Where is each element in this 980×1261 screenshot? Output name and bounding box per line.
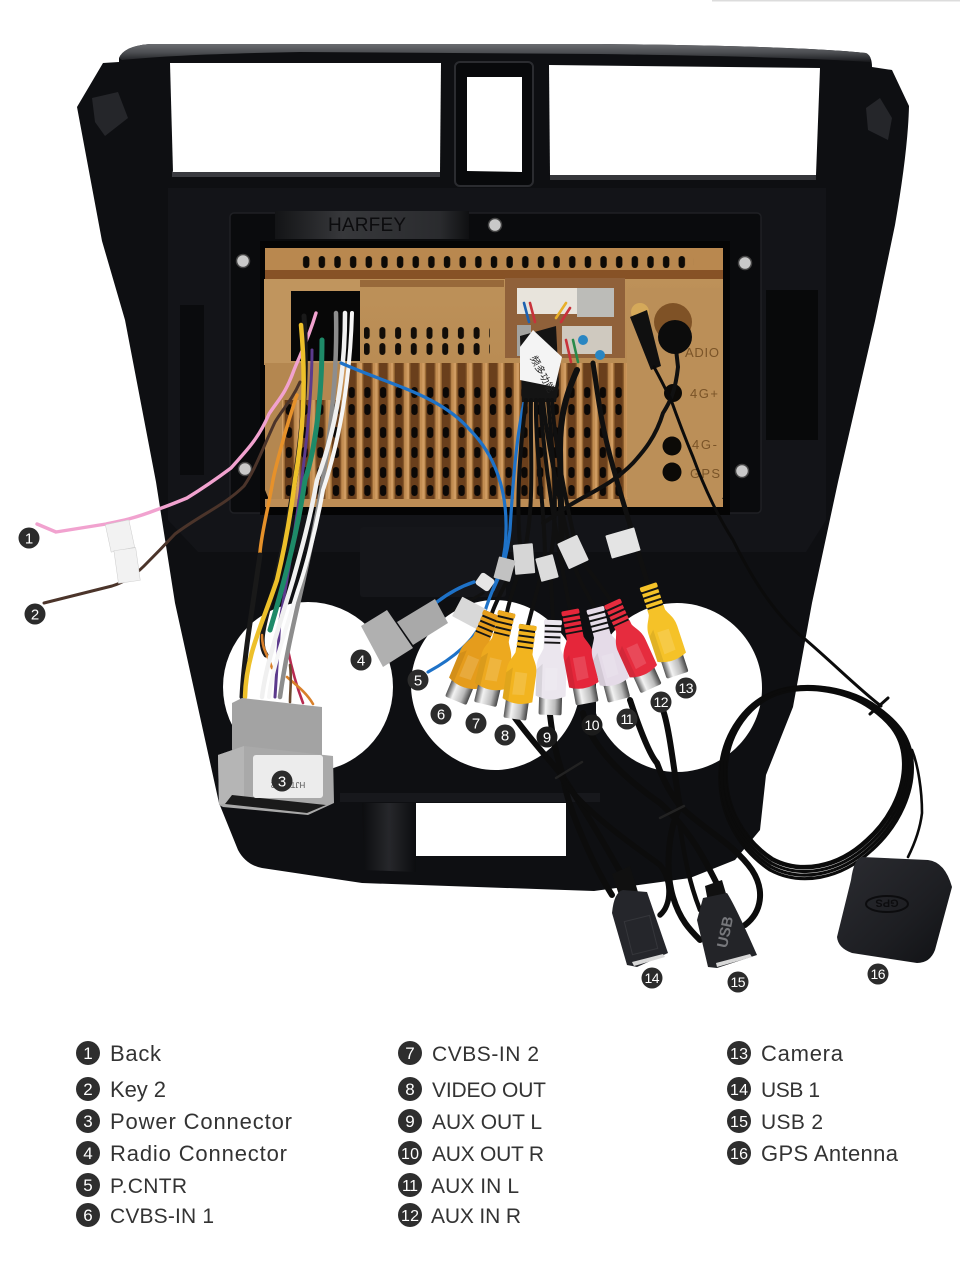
antenna hole lower [662, 462, 682, 482]
legend item 13: 13 [730, 1046, 748, 1063]
connector front [218, 746, 334, 815]
harness recess [505, 278, 625, 358]
camera cable [593, 363, 648, 585]
loose wires: back and key [37, 313, 316, 603]
callout 12 [650, 692, 672, 712]
port labels: GPS [690, 466, 720, 481]
port labels: ADIO [685, 345, 719, 360]
connector leads [524, 303, 578, 362]
legend item 6 [76, 1203, 214, 1228]
callout 7 [466, 712, 486, 734]
centre cable [560, 370, 577, 560]
HARFEY label strip [275, 211, 469, 239]
panel: gold radio back housing [260, 241, 730, 515]
legend item 14: USB 1 [761, 1079, 820, 1102]
legend item 2 [76, 1077, 166, 1102]
callout 8: 8 [501, 728, 509, 744]
GPS coil fourth [726, 690, 903, 866]
inner recess [168, 188, 826, 552]
tag group left [513, 543, 535, 575]
callout 3 [272, 770, 292, 792]
top edge line [712, 0, 960, 2]
callout 11 [616, 708, 638, 730]
right window [549, 65, 820, 175]
radio connector [361, 599, 448, 667]
camera cable loop [663, 710, 700, 940]
callout 9 [536, 726, 558, 748]
cable to USB 2 b [630, 700, 760, 925]
brown key wire [44, 382, 300, 603]
right side pocket [766, 290, 818, 440]
legend item 2: 2 [83, 1080, 93, 1099]
window bottom lip left [172, 171, 440, 177]
plug: camera yellow [634, 580, 692, 680]
legend item 7: 7 [405, 1044, 415, 1063]
callout 13: 13 [678, 680, 694, 696]
wire tag lower [114, 548, 140, 583]
yellow wire [245, 325, 304, 697]
left ear clip [92, 92, 128, 136]
legend item 1 [76, 1041, 162, 1066]
white wire [262, 313, 345, 697]
callout 14 [642, 968, 662, 988]
legend item 15: 15 [730, 1114, 748, 1131]
fin bank [282, 363, 628, 507]
legend item 14 [727, 1077, 820, 1102]
callout 5: 5 [414, 672, 422, 690]
callout 6 [430, 704, 452, 724]
camera tag [605, 527, 641, 559]
connector side shade [218, 746, 244, 805]
legend item 13: Camera [761, 1041, 844, 1066]
callout 1: 1 [25, 530, 33, 548]
antenna return cable [543, 340, 678, 523]
GPS embossed text: GPS [875, 896, 899, 908]
USB 1 body [612, 890, 668, 967]
legend item 12: AUX IN R [431, 1205, 521, 1228]
white outer wire [269, 313, 352, 697]
harness tape and label [520, 326, 562, 402]
blue capacitor caps [578, 335, 605, 360]
GPS coil third [721, 687, 910, 875]
USB 2 plug [697, 880, 757, 968]
cable to USB 1 a [515, 718, 622, 875]
legend item 10: AUX OUT R [432, 1143, 544, 1166]
cable tie right [660, 806, 684, 818]
USB 1 symbol panel [624, 915, 658, 955]
main body [264, 279, 723, 365]
orange wire [260, 395, 297, 552]
legend item 5 [76, 1173, 187, 1198]
large socket [654, 303, 692, 341]
connector socket [291, 291, 360, 361]
black wire [262, 316, 305, 655]
cable loop left [560, 775, 669, 915]
lower left fin bank [282, 400, 342, 507]
RCA plug row [442, 580, 692, 721]
lower vent block [340, 793, 600, 802]
grey connector [577, 288, 614, 317]
harness wires [492, 340, 678, 625]
left side pocket [180, 305, 204, 475]
legend item 9: AUX OUT L [432, 1111, 542, 1134]
shadow band [265, 270, 723, 280]
legend item 10: 10 [401, 1146, 419, 1163]
blue radio wire [437, 582, 474, 602]
vent hole divider [578, 600, 596, 780]
fan wire 6 [552, 400, 612, 602]
fan wire 5 [548, 400, 555, 620]
cable to USB 1 b [550, 715, 612, 895]
port labels [685, 345, 720, 481]
legend item 6: CVBS-IN 1 [110, 1205, 214, 1228]
plug: AUX OUT L white [535, 620, 568, 715]
left vent hole [223, 602, 393, 772]
callout 10 [582, 714, 602, 736]
plug: AUX OUT R red [555, 607, 602, 706]
legend item 5: 5 [83, 1176, 93, 1195]
lower centre window [416, 803, 566, 856]
legend item 4: Radio Connector [110, 1141, 287, 1166]
radio antenna socket and cables [630, 303, 692, 370]
radio connector second piece [397, 599, 448, 645]
paper label [520, 330, 562, 387]
plug: AUX IN L white [580, 604, 634, 704]
fan wire 4 [543, 400, 595, 608]
label print: HJT #202 [270, 780, 305, 789]
callout 6: 6 [437, 706, 445, 724]
USB 2 body [697, 893, 757, 968]
radio tag [452, 597, 487, 629]
callout 13 [676, 678, 696, 698]
black heat shrink [242, 555, 260, 697]
callout 16 [868, 964, 888, 984]
plug: AUX IN R red [598, 596, 665, 695]
GPS stem [908, 750, 922, 857]
blue wire bundle [493, 398, 525, 590]
callout 11: 11 [620, 711, 634, 727]
legend item 2: Key 2 [110, 1077, 166, 1102]
right ear clip [866, 98, 892, 140]
centre window surround [455, 62, 533, 186]
orange short wire [287, 677, 313, 704]
HARFEY text: HARFEY [328, 215, 406, 236]
fan wire 3 [528, 400, 545, 625]
legend item 12 [398, 1203, 521, 1228]
port labels: 4G- [692, 437, 717, 452]
blue wire long [341, 363, 506, 672]
legend item 3: Power Connector [110, 1109, 292, 1134]
lower left gold block [265, 363, 342, 507]
mounting bracket [230, 213, 761, 513]
callout 14: 14 [644, 970, 660, 986]
USB 2 port [716, 954, 752, 967]
lower left connector [517, 325, 531, 356]
fan wire 2 [507, 400, 531, 612]
white connector [517, 288, 577, 314]
legend item 16: 16 [730, 1146, 748, 1163]
left window [170, 63, 441, 172]
plug: CVBS-IN 2 orange [471, 609, 522, 708]
legend item 5: P.CNTR [110, 1175, 187, 1198]
USB 1 plug [612, 866, 668, 967]
USB and AUX black cables [515, 700, 760, 940]
legend item 1: 1 [83, 1044, 93, 1063]
legend item 15 [727, 1109, 823, 1134]
callout 1 [18, 528, 40, 548]
middle vent slots [364, 326, 490, 358]
legend item 7 [398, 1041, 539, 1066]
callout 10: 10 [584, 717, 600, 733]
callout 5 [408, 670, 428, 690]
pink back wire [37, 313, 316, 532]
window bottom lip right [550, 174, 816, 180]
connector opening [225, 795, 326, 813]
callout 2 [24, 604, 46, 624]
GPS embossed logo [866, 896, 908, 912]
fan wire 7 [540, 400, 570, 610]
GPS antenna cable [654, 367, 922, 879]
callout 4 [350, 650, 372, 670]
cable to USB 2 a [583, 713, 717, 884]
GPS coil fifth [725, 687, 906, 868]
legend item 6: 6 [83, 1206, 93, 1225]
wire tag upper [105, 520, 135, 552]
power wire bundle [242, 313, 352, 704]
legend item 11: 11 [402, 1178, 418, 1195]
left raised plate [264, 279, 360, 363]
legend item 16: GPS Antenna [761, 1141, 899, 1166]
legend item 7: CVBS-IN 2 [432, 1043, 539, 1066]
cable tags [452, 527, 641, 629]
GPS cable tie [870, 698, 888, 714]
centre window [467, 77, 522, 172]
top strip [265, 248, 723, 272]
callout 7: 7 [472, 716, 480, 732]
grey wire [280, 313, 336, 697]
antenna hole middle [662, 436, 682, 456]
port labels: 4G+ [690, 386, 718, 401]
legend item 14: 14 [730, 1082, 748, 1099]
panel: black dash fascia frame [77, 44, 909, 891]
GPS cable from head unit [654, 367, 881, 706]
plug: VIDEO OUT yellow [500, 623, 543, 721]
legend item 9: 9 [405, 1112, 415, 1131]
callout 12: 12 [654, 694, 669, 710]
legend item 15: USB 2 [761, 1111, 823, 1134]
legend item 12: 12 [401, 1208, 419, 1225]
diagram number callouts [18, 528, 888, 992]
socket plug [658, 320, 692, 354]
legend item 3: 3 [83, 1112, 93, 1131]
callout 16: 16 [870, 966, 886, 982]
orange loop wire [262, 635, 272, 668]
lower vent shade [362, 803, 416, 872]
right vent hole [592, 603, 762, 772]
USB 1 port [632, 954, 665, 966]
tag 2 [493, 556, 516, 582]
legend item 11 [398, 1173, 519, 1198]
black radio lead [448, 593, 483, 613]
callout 8 [494, 724, 516, 746]
legend [76, 1041, 899, 1228]
cable loop 2 [680, 827, 700, 910]
callout 3: 3 [278, 774, 286, 790]
callout 9: 9 [543, 730, 551, 746]
purple wire [275, 350, 312, 697]
fan wire 1 [492, 400, 526, 613]
tag 3 [535, 554, 559, 582]
tag 4 [557, 535, 589, 569]
power connector [218, 698, 334, 815]
green wire [270, 340, 322, 630]
legend item 4: 4 [83, 1144, 93, 1163]
lower right connector [562, 326, 612, 354]
GPS coil outer [720, 687, 912, 879]
red wire [288, 650, 303, 703]
USB 2 moulded text: USB [714, 915, 737, 949]
right plate [627, 288, 723, 500]
left angle plug [630, 310, 661, 370]
blue signal wires [341, 363, 525, 672]
lower module recess [360, 527, 506, 597]
gold socket ring [631, 303, 649, 321]
legend item 11: AUX IN L [431, 1175, 519, 1198]
top rim highlight [119, 44, 870, 62]
connector label [253, 755, 323, 798]
brown wire [289, 665, 292, 702]
middle vent hole [411, 600, 580, 770]
top vent slots [302, 255, 694, 271]
antenna hole upper [664, 384, 682, 402]
plate shadow [360, 280, 504, 287]
callout 15 [728, 972, 748, 992]
callout 4: 4 [357, 652, 365, 670]
legend item 8: 8 [405, 1080, 415, 1099]
paper label text: 频多功能 [527, 353, 558, 395]
screw [236, 218, 752, 478]
GPS antenna [837, 857, 952, 963]
fin bottom rail [265, 499, 723, 507]
cable tie left [556, 762, 582, 778]
blue wire clip [474, 572, 496, 592]
GPS coil second [723, 687, 908, 871]
callout 2: 2 [31, 606, 39, 624]
plug: CVBS-IN 1 orange [442, 607, 506, 707]
callout 15: 15 [730, 974, 746, 990]
legend item 8: VIDEO OUT [432, 1079, 546, 1102]
legend item 1: Back [110, 1041, 162, 1066]
